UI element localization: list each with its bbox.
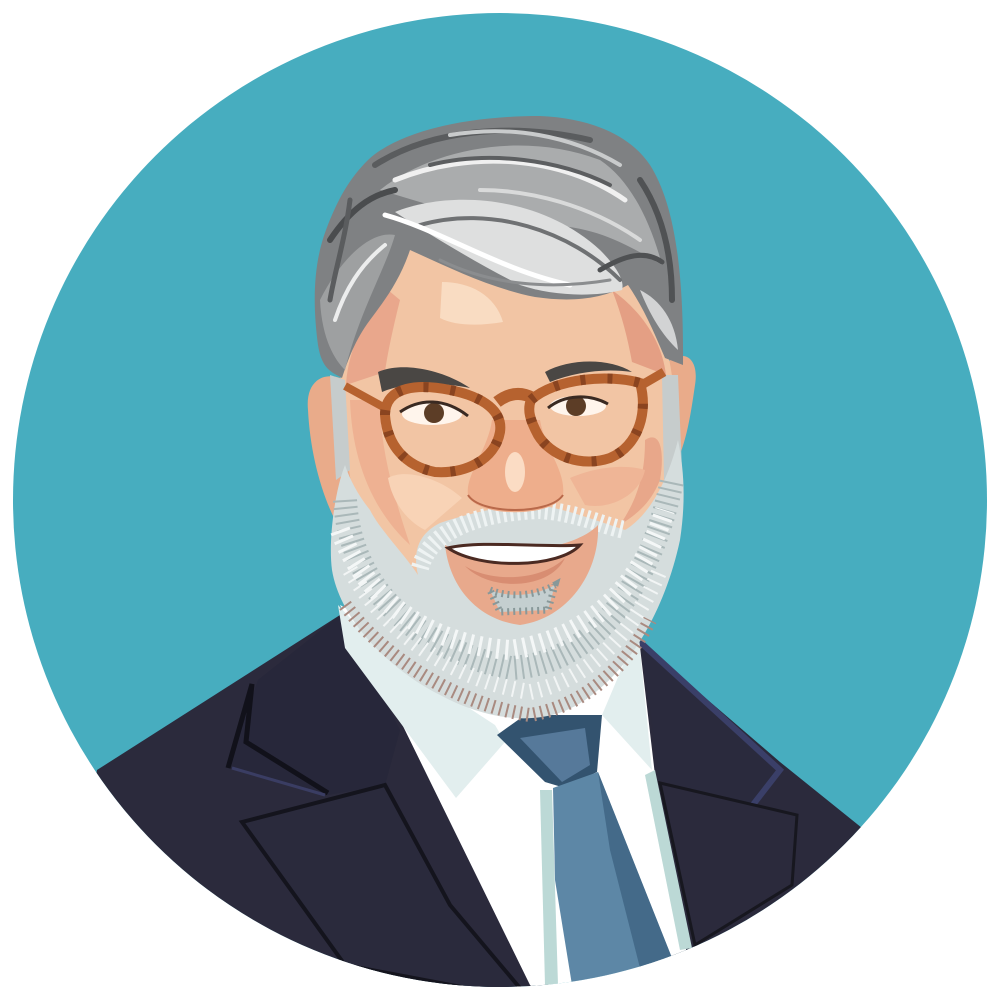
nose (468, 420, 563, 512)
beard (331, 440, 684, 718)
hair strands (330, 131, 672, 320)
face shading (346, 282, 666, 545)
sideburns (330, 375, 682, 480)
figure (60, 116, 862, 1000)
jacket (60, 615, 862, 1000)
eyebrows (378, 362, 632, 392)
face (340, 250, 672, 575)
glasses (345, 372, 664, 472)
mouth (448, 544, 580, 584)
hair (315, 116, 683, 378)
ears (308, 356, 696, 520)
eyes (400, 396, 608, 425)
shirt (338, 605, 695, 1000)
tie (497, 715, 672, 985)
